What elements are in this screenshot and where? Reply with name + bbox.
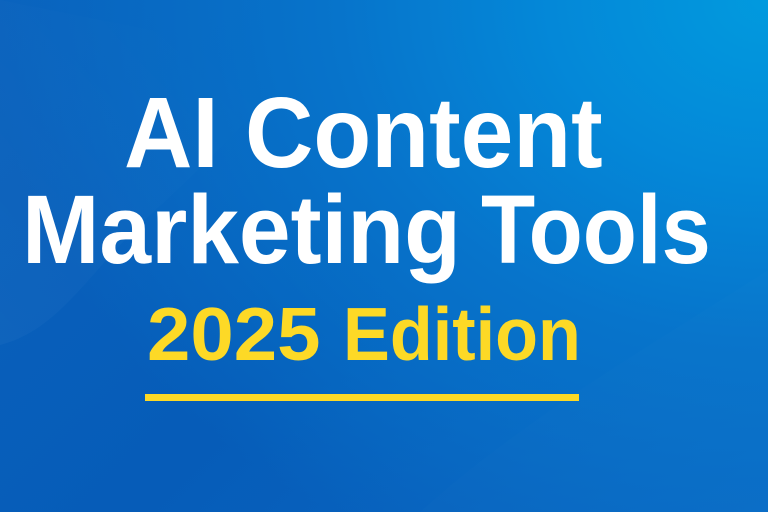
title line 2: Marketing <box>22 175 461 284</box>
title line 1: AI Content <box>124 77 603 189</box>
subtitle <box>147 292 581 376</box>
subtitle: 2025 <box>147 292 321 376</box>
subtitle: Edition <box>343 292 581 376</box>
title line 2 <box>22 175 711 284</box>
title line 2: Tools <box>481 175 711 284</box>
underline <box>145 394 579 401</box>
